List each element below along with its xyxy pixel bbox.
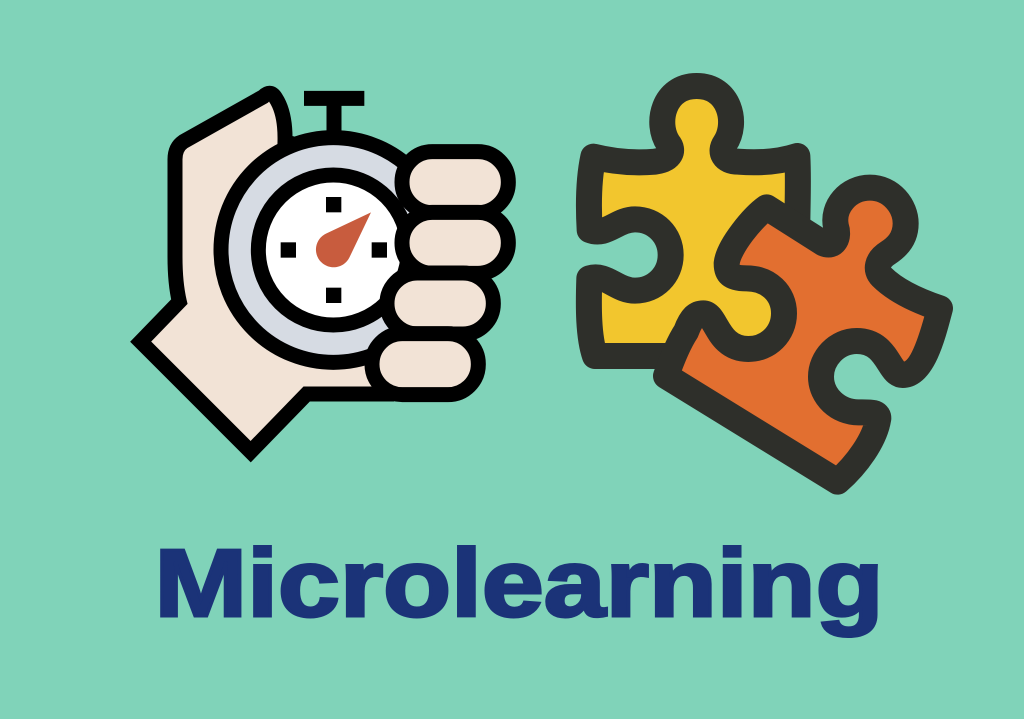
orange puzzle piece [666, 188, 940, 482]
finger 2 [402, 212, 508, 273]
icon: hand holding stopwatch [141, 93, 508, 452]
icon: two puzzle pieces [589, 86, 940, 482]
dial tick marks [281, 197, 387, 303]
hand palm and thumb [141, 93, 387, 452]
stopwatch dial [258, 175, 408, 325]
finger 4 [372, 334, 478, 395]
stopwatch crown [304, 98, 364, 137]
yellow puzzle piece [589, 86, 798, 356]
finger 1 [402, 152, 508, 213]
stopwatch outer case [221, 138, 446, 362]
stopwatch needle [316, 212, 371, 267]
title: Microlearning [154, 530, 884, 637]
finger 3 [387, 273, 493, 334]
